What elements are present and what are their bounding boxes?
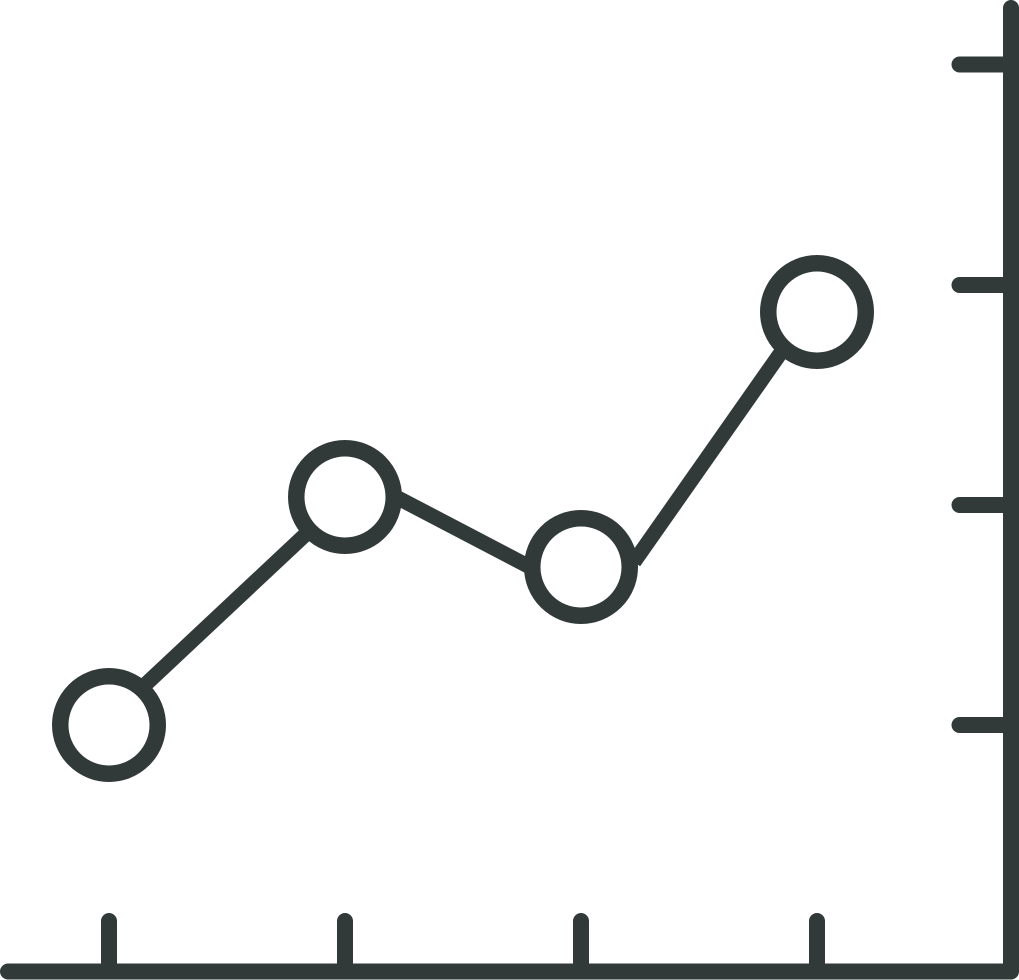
data points xyxy=(60,263,866,774)
line segments xyxy=(146,351,782,684)
y axis ticks xyxy=(960,64,1010,725)
x axis ticks xyxy=(109,921,817,970)
